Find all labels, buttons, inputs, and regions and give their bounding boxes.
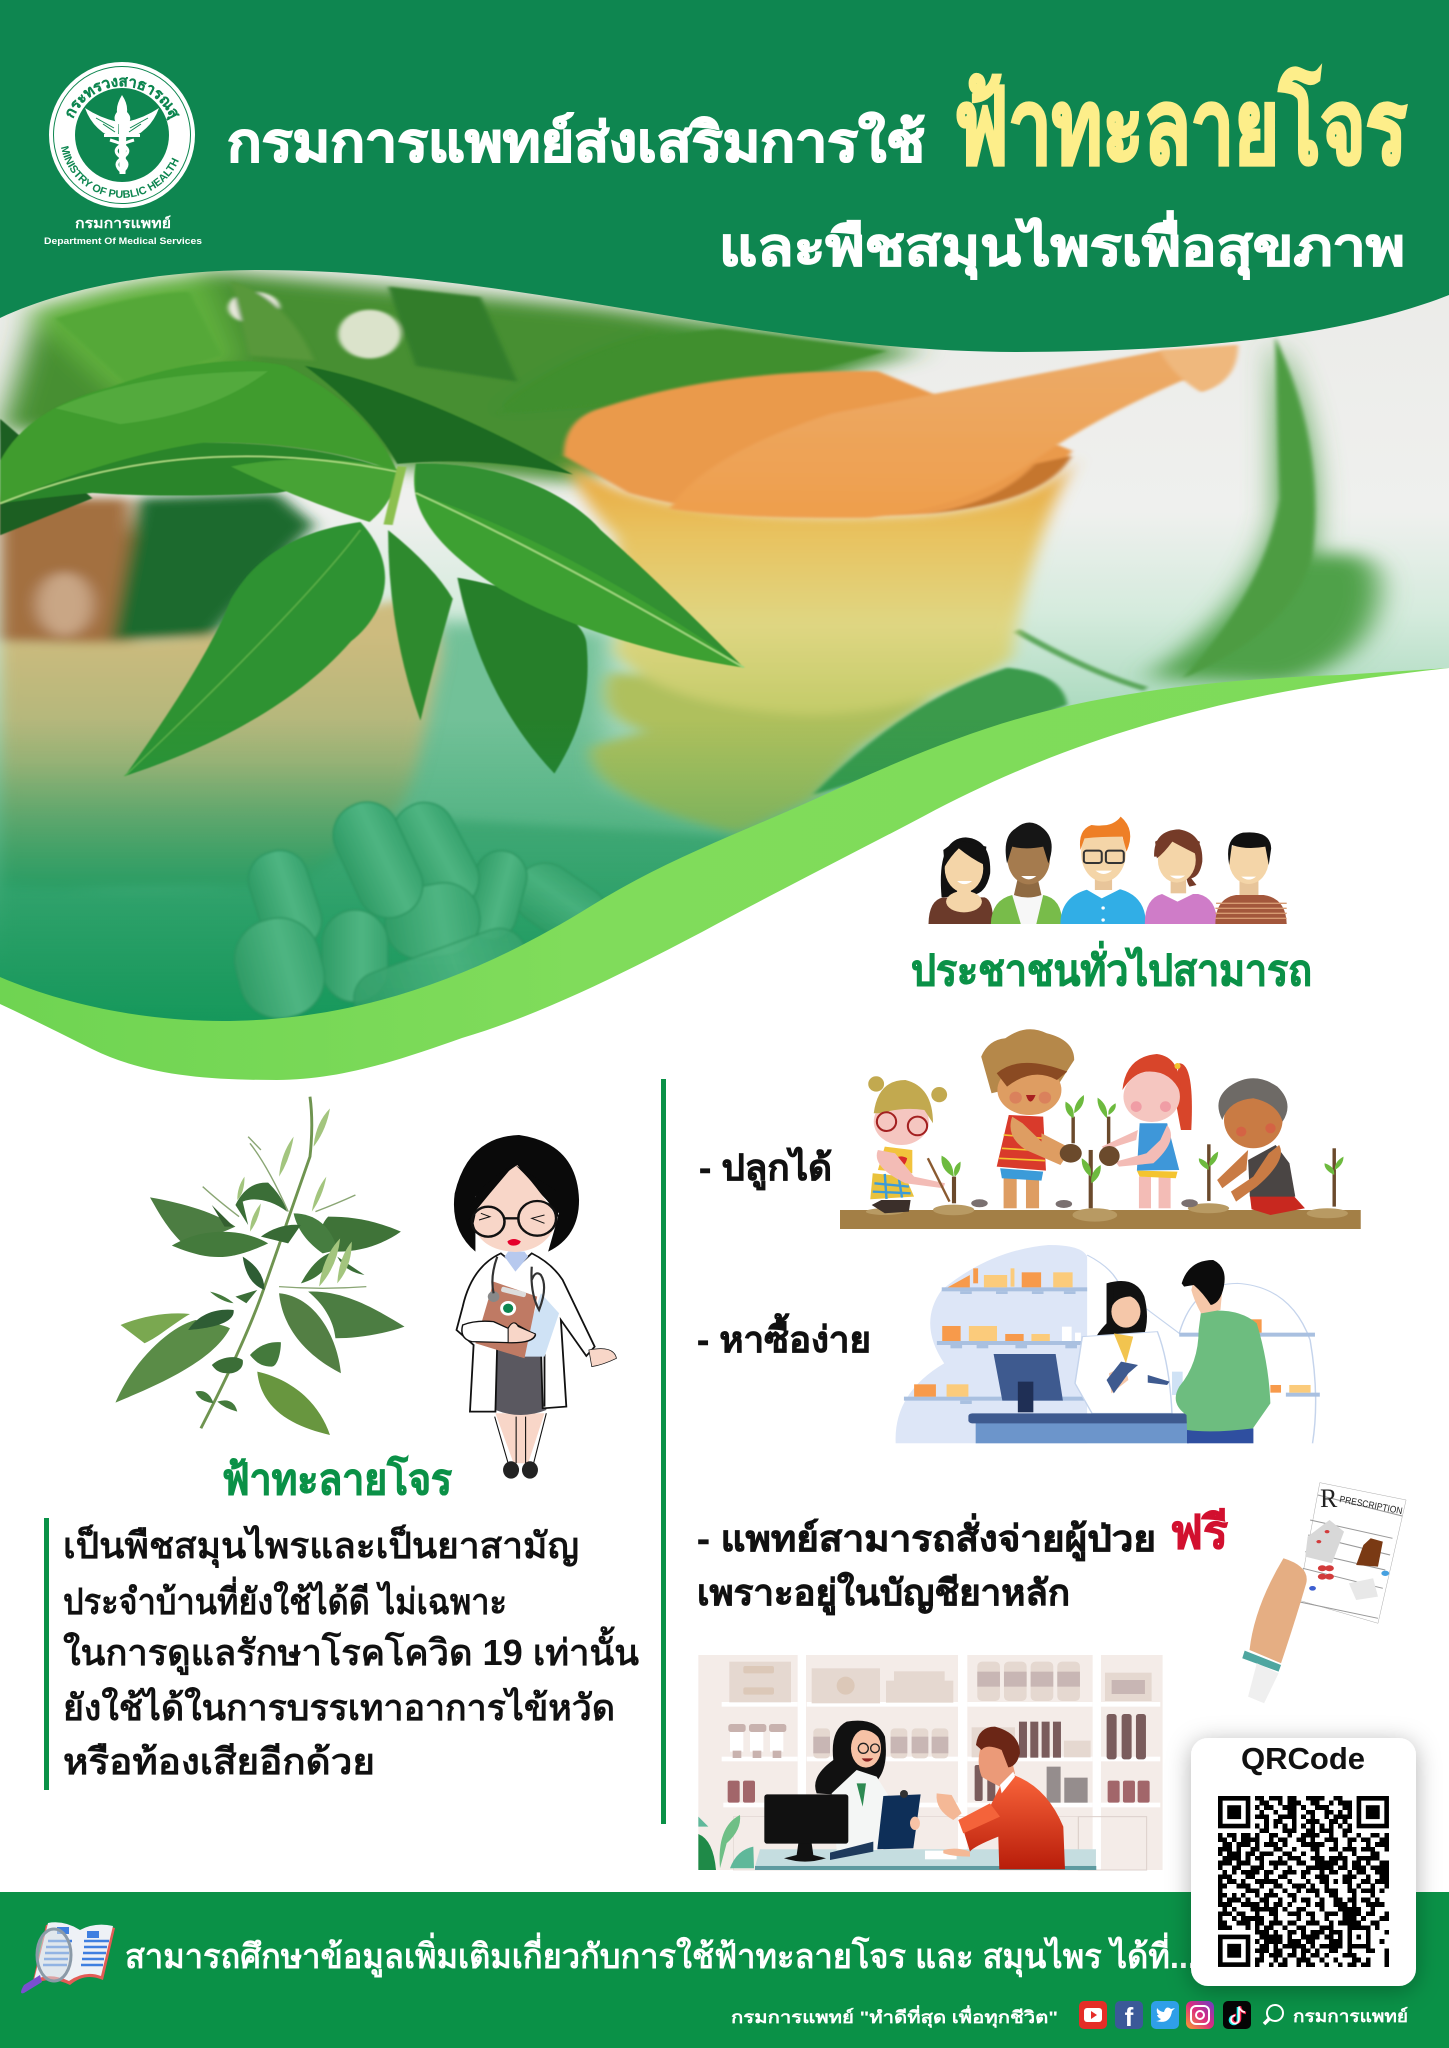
logo caption: Department Of Medical Services: [44, 236, 202, 247]
light green wave band: [0, 668, 1449, 1110]
arm and hand: [462, 1321, 535, 1343]
hand: [1250, 1558, 1307, 1663]
right mortar: [564, 456, 1076, 834]
patient: [937, 1727, 1065, 1869]
footer department name: กรมการแพทย์: [1293, 2006, 1408, 2026]
doctor: [815, 1721, 893, 1850]
clipboard: [475, 1282, 537, 1358]
label: แพทย์สามารถสั่งจ่ายผู้ป่วย: ฟรี: [1170, 1506, 1228, 1558]
plant name heading: ฟ้าทะลายโจร: [222, 1455, 452, 1503]
hero photo: herbs, mortars and capsules: [0, 260, 1449, 1100]
pharmacist: [1075, 1281, 1183, 1413]
sapling plants: [941, 1095, 1344, 1208]
kid with glasses: [868, 1076, 950, 1213]
kid with red hair: [1099, 1054, 1192, 1208]
icon: facebook: [1115, 2001, 1143, 2032]
herb leaves: [0, 361, 744, 776]
illustration: group of people: [929, 817, 1287, 924]
label: แพทย์สามารถสั่งจ่ายผู้ป่วย: [697, 1506, 1228, 1616]
illustration: hand holding prescription: R: [1320, 1484, 1338, 1513]
title line 1: กรมการแพทย์ส่งเสริมการใช้: [227, 111, 925, 173]
legs and shoes: [495, 1413, 546, 1479]
plant: andrographis branch: [115, 1097, 405, 1435]
illustration: hand holding prescription: PRESCRIPTION: [1338, 1494, 1403, 1517]
footer slogan: กรมการแพทย์ "ทำดีที่สุด เพื่อทุกชีวิต": [731, 2005, 1058, 2028]
capsules: [226, 792, 620, 1034]
logo caption: กรมการแพทย์: [75, 215, 171, 231]
icon: twitter: [1151, 2001, 1179, 2029]
description block: เป็นพืชสมุนไพรและเป็นยาสามัญ: [63, 1523, 579, 1569]
icon: open book with magnifier: [21, 1922, 115, 1993]
description block: ประจำบ้านที่ยังใช้ได้ดี ไม่เฉพาะ: [63, 1576, 507, 1622]
illustration: children planting: [840, 1029, 1361, 1229]
icon: instagram: [1186, 2001, 1214, 2029]
collar: [505, 1252, 528, 1272]
skirt: [495, 1347, 546, 1415]
monitor: [764, 1794, 848, 1844]
logo caption: [44, 215, 202, 247]
description block: [44, 1518, 639, 1790]
icon: tiktok: [1223, 2001, 1251, 2029]
logo: ministry of public health seal: MINISTRY OF PUBLIC HEALTH: [61, 146, 179, 198]
footer green band: [0, 1892, 1449, 2048]
header green banner: [0, 0, 1449, 352]
kid with straw hat: [981, 1029, 1082, 1208]
kid kneeling: [1217, 1078, 1305, 1215]
crabs: [971, 1199, 1198, 1208]
label: หาซื้อง่าย: - หาซื้อง่าย: [697, 1313, 871, 1360]
stethoscope: [492, 1257, 544, 1310]
background blurred foliage: [0, 271, 1379, 848]
white content background: [0, 668, 1449, 2048]
left mortar: [0, 493, 739, 1022]
heading: ประชาชนทั่วไปสามารถ: ประชาชนทั่วไปสามารถ: [911, 941, 1312, 994]
vertical divider: [661, 1079, 666, 1824]
footer main text: สามารถศึกษาข้อมูลเพิ่มเติมเกี่ยวกับการใช้ฟ้าทะลายโจร และ สมุนไพร ได้ที่...: [125, 1932, 1197, 1978]
customer: [1176, 1260, 1270, 1443]
clipboard: [877, 1794, 921, 1849]
label: ปลูกได้: - ปลูกได้: [699, 1146, 832, 1191]
qr matrix: [1218, 1798, 1389, 1965]
icon: facebook: f: [1125, 2002, 1134, 2032]
counter: [976, 1423, 1189, 1443]
social media icons: [1079, 2001, 1283, 2032]
description block: ในการดูแลรักษาโรคโควิด 19 เท่านั้น: [63, 1626, 639, 1676]
icon: youtube: [1079, 2001, 1107, 2029]
illustration: hand holding prescription: [1242, 1483, 1406, 1703]
doctor character: [454, 1135, 616, 1479]
monitor: [994, 1354, 1063, 1401]
icon: search: [1264, 2005, 1283, 2024]
lab coat: [457, 1253, 595, 1412]
description block: ยังใช้ได้ในการบรรเทาอาการไข้หวัด: [63, 1686, 615, 1728]
description block: หรือท้องเสียอีกด้วย: [63, 1741, 375, 1782]
illustration: pharmacy counter: [896, 1245, 1320, 1443]
qr label: QRCode: [1241, 1741, 1365, 1776]
desk: [755, 1849, 1096, 1867]
logo: ministry of public health seal: [49, 62, 195, 208]
label: แพทย์สามารถสั่งจ่ายผู้ป่วย: เพราะอยู่ในบัญชียาหลัก: [697, 1571, 1070, 1616]
label: แพทย์สามารถสั่งจ่ายผู้ป่วย: - แพทย์สามารถสั่งจ่ายผู้ป่วย: [697, 1513, 1156, 1562]
illustration: doctor consulting patient: [698, 1655, 1163, 1870]
title line 2: และพืชสมุนไพรเพื่อสุขภาพ: [719, 211, 1405, 280]
plants: [698, 1815, 754, 1870]
hair and face: [454, 1135, 579, 1252]
icon: caduceus: [85, 95, 159, 174]
QR code card: [1191, 1738, 1416, 1986]
ground: [840, 1210, 1361, 1229]
